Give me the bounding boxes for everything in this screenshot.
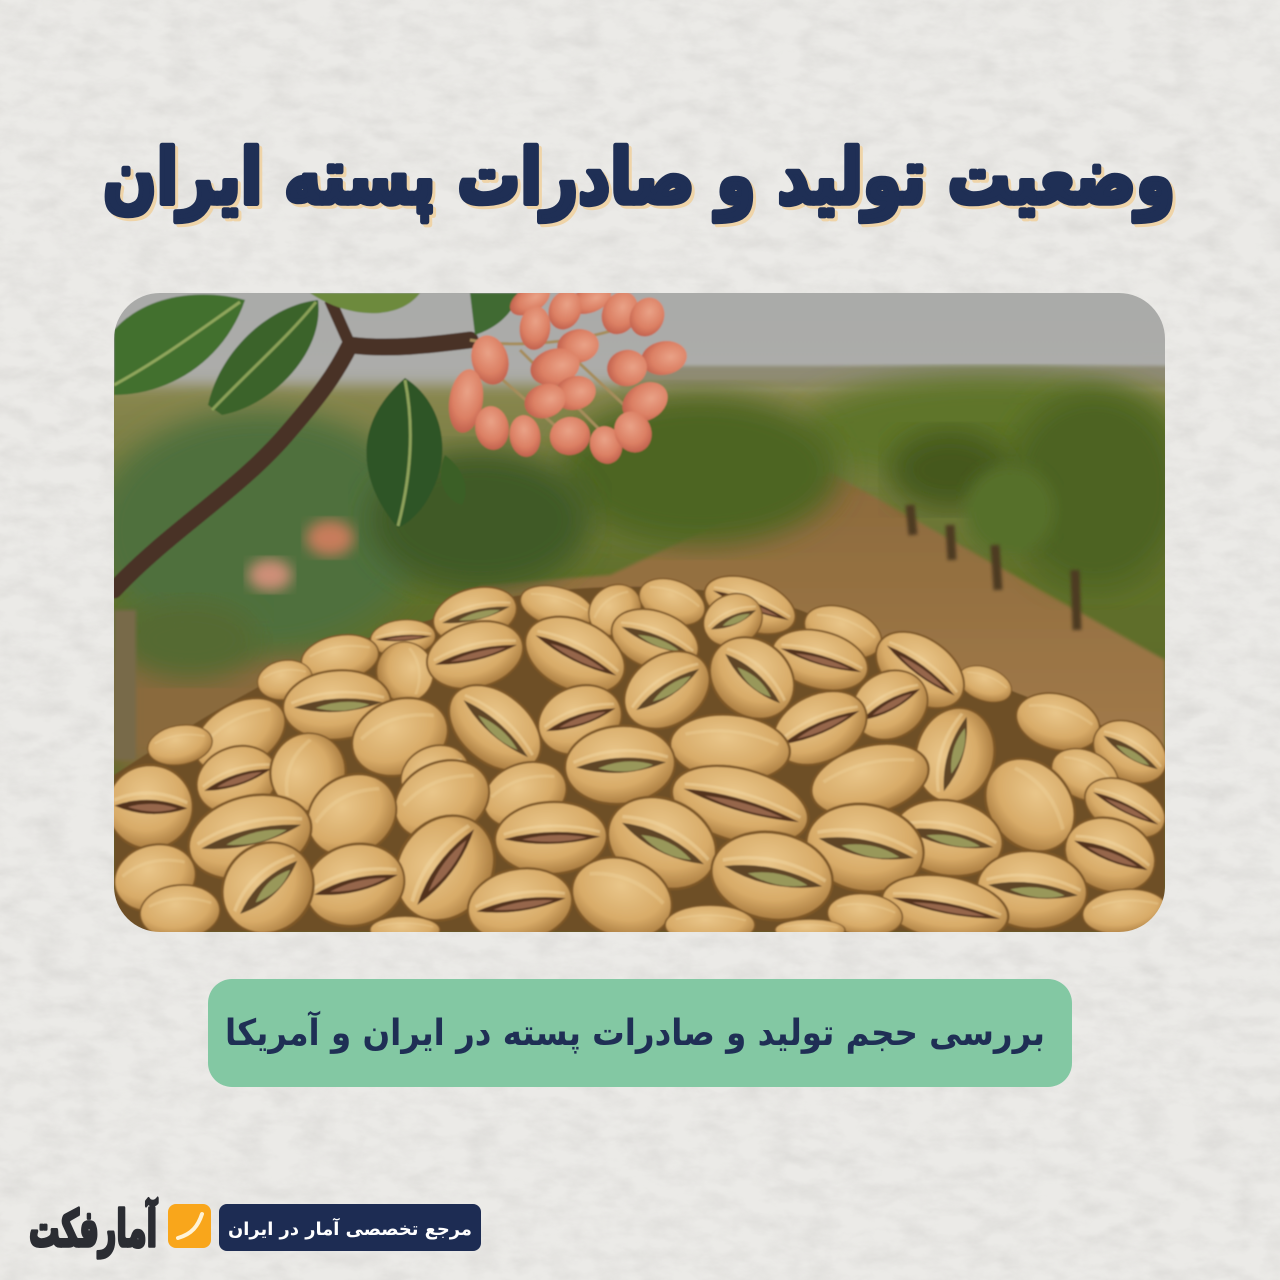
orchard background xyxy=(114,293,1165,932)
pistachio pile xyxy=(107,565,1178,952)
branch and leaves xyxy=(114,293,520,760)
pistachio cluster xyxy=(448,293,688,465)
footer tagline pill: مرجع تخصصی آمار در ایران xyxy=(228,1217,472,1240)
photo: pistachio orchard and pile xyxy=(114,293,1165,932)
icon: orange logo mark xyxy=(168,1204,211,1248)
logo wordmark: آمارفکت xyxy=(29,1198,158,1258)
footer tagline pill xyxy=(219,1204,481,1251)
subtitle pill xyxy=(208,979,1072,1087)
subtitle pill: بررسی حجم تولید و صادرات پسته در ایران و آمریکا xyxy=(225,1010,1045,1054)
